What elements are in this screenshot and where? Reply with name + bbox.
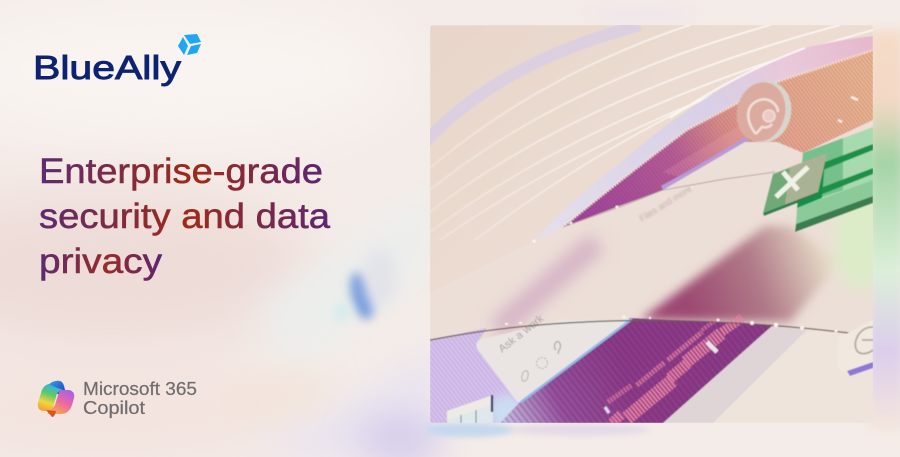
icon: excel X tile bbox=[763, 153, 827, 216]
thin horizon line with beads bbox=[430, 315, 873, 340]
icon: copilot ribbon bbox=[38, 381, 74, 417]
magenta to orange ribbed band bbox=[563, 50, 873, 227]
prompt card bbox=[476, 312, 632, 402]
soft green glow bbox=[834, 196, 873, 287]
tile glyph bbox=[855, 327, 873, 354]
white accent marks bbox=[707, 342, 717, 352]
attachment icon bbox=[521, 370, 529, 382]
pink data bars bbox=[608, 318, 742, 423]
blurred caption on sheet: Files and more bbox=[638, 184, 694, 224]
lavender rim of band bbox=[533, 36, 873, 241]
upper thin line bbox=[532, 172, 775, 243]
panel: abstract product illustration bbox=[425, 25, 886, 430]
lavender ribbed sheet bbox=[430, 328, 520, 423]
white curved lines bbox=[430, 25, 880, 240]
small chart tile bbox=[447, 395, 493, 423]
purple textured arc bbox=[425, 25, 640, 142]
chat bubble glyph bbox=[748, 99, 778, 134]
icon: chat coin bbox=[736, 82, 792, 142]
purple tile edge bbox=[847, 362, 873, 376]
logo: BlueAlly bbox=[33, 34, 201, 86]
lower right cream area bbox=[663, 325, 873, 423]
pink blurred streak bbox=[497, 242, 597, 330]
bright rim highlight bbox=[670, 48, 805, 118]
blue card edge bbox=[521, 319, 632, 402]
prompt text: Ask a work bbox=[496, 312, 547, 355]
heading line 3: privacy bbox=[39, 242, 163, 281]
logo wordmark: BlueAlly bbox=[33, 49, 182, 86]
serrated light edge bbox=[563, 50, 873, 227]
heading line 2: security and data bbox=[39, 197, 331, 236]
blue glow bbox=[492, 390, 520, 423]
brand text line 1: Microsoft 365 bbox=[83, 378, 197, 399]
focus icon bbox=[536, 358, 548, 368]
white marks on band bbox=[838, 97, 858, 122]
lavender ribbing bbox=[430, 328, 508, 423]
logo cube icon bbox=[178, 34, 201, 55]
purple ribbed panel bbox=[500, 318, 773, 423]
pale sheet below band bbox=[596, 143, 744, 214]
heading bbox=[39, 152, 331, 281]
brand text line 2: Copilot bbox=[83, 397, 145, 418]
icon: clock tile bbox=[846, 321, 873, 376]
X glyph bbox=[776, 167, 808, 197]
mauve blurred shadow bbox=[640, 226, 840, 322]
icon: excel sheets bbox=[795, 127, 873, 232]
heading line 1: Enterprise-grade bbox=[39, 152, 323, 191]
grey diagonal strip bbox=[663, 325, 807, 423]
logo: Microsoft 365 Copilot bbox=[38, 378, 197, 418]
mic icon bbox=[554, 342, 561, 354]
